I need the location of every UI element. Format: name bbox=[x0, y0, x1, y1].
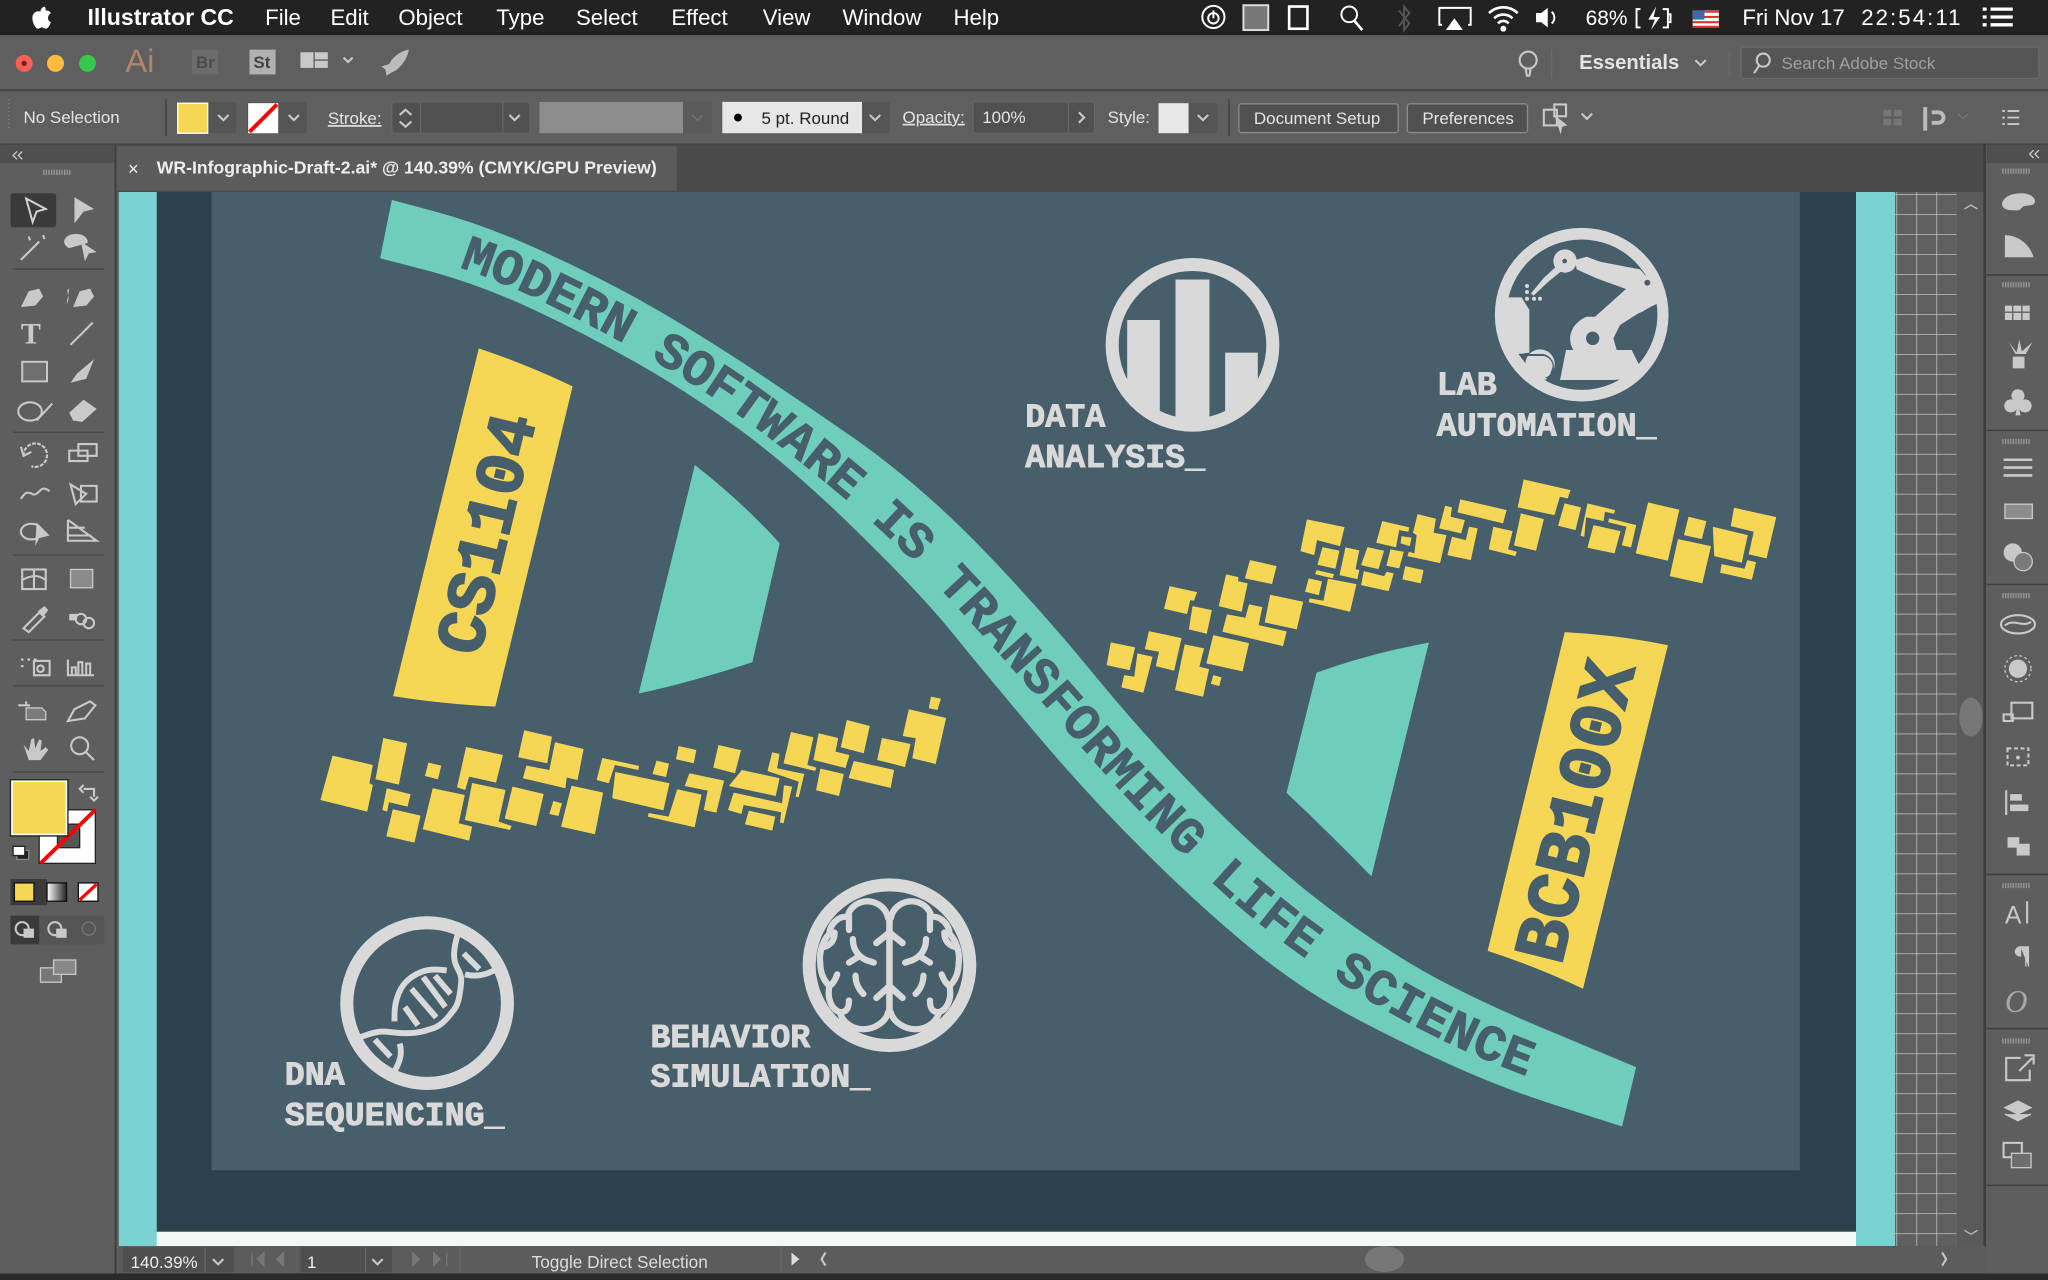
stroke swatch bbox=[247, 102, 307, 133]
menu items: Type bbox=[496, 5, 544, 30]
label: DNA sequencing: DNA bbox=[285, 1057, 345, 1095]
label: lab automation: LAB bbox=[1437, 366, 1497, 404]
icon: transform selection bbox=[1544, 104, 1592, 135]
menu items: Illustrator CC bbox=[88, 4, 234, 30]
right panel dock bbox=[1987, 145, 2048, 1273]
right hemisphere bbox=[891, 901, 959, 1029]
icon: DNA helix bbox=[347, 923, 507, 1083]
menu items: View bbox=[763, 5, 811, 30]
status bar: Toggle Direct Selection bbox=[532, 1252, 708, 1272]
teal shape right bbox=[1287, 643, 1429, 876]
macOS menu bar: 68% bbox=[1586, 7, 1627, 30]
label: behavior simulation bbox=[650, 1019, 871, 1097]
left hemisphere bbox=[820, 901, 888, 1029]
opacity field bbox=[973, 102, 1095, 133]
icon: rocket bbox=[381, 50, 409, 76]
banner: CS1104 bbox=[393, 348, 573, 707]
tools panel bbox=[0, 145, 116, 1273]
macOS menu bar bbox=[0, 0, 2048, 35]
panel icons: O bbox=[2005, 984, 2028, 1019]
brush definition: 5 pt. Round bbox=[761, 109, 849, 128]
label: lab automation: AUTOMATION_ bbox=[1437, 408, 1658, 446]
icon: data analysis chart bbox=[1112, 264, 1273, 438]
stock search: Search Adobe Stock bbox=[1782, 54, 1936, 73]
menu items bbox=[88, 4, 999, 30]
fill and stroke swatches bbox=[10, 780, 98, 863]
document setup button bbox=[1239, 104, 1398, 133]
selected tool bbox=[10, 193, 56, 227]
stock search bbox=[1741, 47, 2039, 78]
icon: apple logo bbox=[32, 7, 51, 29]
label: DNA sequencing bbox=[285, 1057, 506, 1135]
icon: flag bbox=[1693, 10, 1719, 27]
menu items: Object bbox=[398, 5, 462, 30]
menu items: Window bbox=[842, 5, 922, 30]
document tab bar: × bbox=[128, 158, 139, 179]
macOS menu bar: Fri Nov 17 bbox=[1742, 5, 1845, 30]
control bar: No Selection bbox=[24, 108, 120, 127]
status icons bbox=[1202, 5, 1671, 31]
icon: light bulb bbox=[1520, 52, 1537, 76]
menu items: File bbox=[265, 5, 301, 30]
status bar: 1 bbox=[307, 1253, 316, 1272]
stock button: St bbox=[253, 53, 271, 72]
label: behavior simulation: SIMULATION_ bbox=[650, 1059, 871, 1097]
label: data analysis: DATA bbox=[1025, 398, 1105, 436]
panel icons bbox=[2001, 193, 2035, 1168]
status bar: 140.39% bbox=[131, 1253, 198, 1272]
app logo: Ai bbox=[125, 42, 154, 79]
icon: align and panel menu bbox=[1883, 107, 2019, 131]
document setup button: Document Setup bbox=[1254, 109, 1380, 128]
stock button bbox=[249, 50, 276, 74]
vertical scrollbar bbox=[1957, 144, 1985, 1247]
banner: BCB100X: BCB100X bbox=[1502, 653, 1657, 971]
ribbon title text: MODERN SOFTWARE IS TRANSFORMING LIFE SCIENCE bbox=[461, 236, 1536, 1076]
bridge button: Br bbox=[196, 53, 215, 72]
style swatch bbox=[1159, 103, 1217, 133]
document tab bar bbox=[118, 145, 1985, 192]
icon: notification list bbox=[1983, 9, 2013, 25]
label: data analysis: ANALYSIS_ bbox=[1025, 439, 1206, 477]
pixel band left bbox=[320, 697, 946, 843]
macOS menu bar: 22:54:11 bbox=[1861, 5, 1960, 30]
tool icons bbox=[18, 197, 97, 760]
opacity field: 100% bbox=[982, 108, 1026, 127]
teal shape left bbox=[639, 465, 780, 694]
icon: brain bbox=[809, 885, 970, 1046]
control bar bbox=[0, 91, 2048, 144]
fill swatch bbox=[176, 102, 236, 133]
status bar bbox=[0, 1246, 2048, 1280]
workspace switcher: Essentials bbox=[1579, 52, 1679, 74]
preferences button bbox=[1407, 104, 1528, 133]
ruler grid strip bbox=[1895, 192, 1957, 1246]
menu items: Edit bbox=[330, 5, 369, 30]
label: data analysis bbox=[1025, 398, 1206, 477]
menu items: Effect bbox=[671, 5, 728, 30]
banner: CS1104: CS1104 bbox=[424, 407, 556, 663]
pixel band right bbox=[1107, 479, 1776, 697]
stroke weight field bbox=[392, 102, 530, 133]
menu items: Select bbox=[576, 5, 638, 30]
tool icons: T bbox=[21, 318, 41, 351]
application bar bbox=[0, 35, 2048, 90]
icon: arrange documents bbox=[300, 52, 353, 68]
color mode buttons bbox=[10, 879, 98, 905]
control bar: Opacity: bbox=[903, 108, 965, 127]
menu items: Help bbox=[953, 5, 999, 30]
screen mode icon bbox=[40, 960, 76, 982]
drawing mode buttons bbox=[10, 916, 104, 944]
control bar: Style: bbox=[1108, 108, 1150, 127]
label: DNA sequencing: SEQUENCING_ bbox=[285, 1097, 506, 1135]
document tab bar: WR-Infographic-Draft-2.ai* @ 140.39% (CMYK/GPU Preview) bbox=[157, 158, 657, 178]
bridge button bbox=[192, 50, 218, 74]
artboard background bbox=[119, 192, 1895, 1246]
preferences button: Preferences bbox=[1422, 109, 1514, 128]
window controls bbox=[16, 55, 96, 72]
control bar: Stroke: bbox=[328, 109, 382, 128]
label: lab automation bbox=[1437, 366, 1658, 446]
label: behavior simulation: BEHAVIOR bbox=[650, 1019, 810, 1057]
panel icons: A bbox=[2005, 902, 2022, 929]
icon: lab automation robot bbox=[1493, 234, 1663, 396]
variable width profile bbox=[539, 102, 712, 133]
brush definition bbox=[722, 102, 889, 133]
